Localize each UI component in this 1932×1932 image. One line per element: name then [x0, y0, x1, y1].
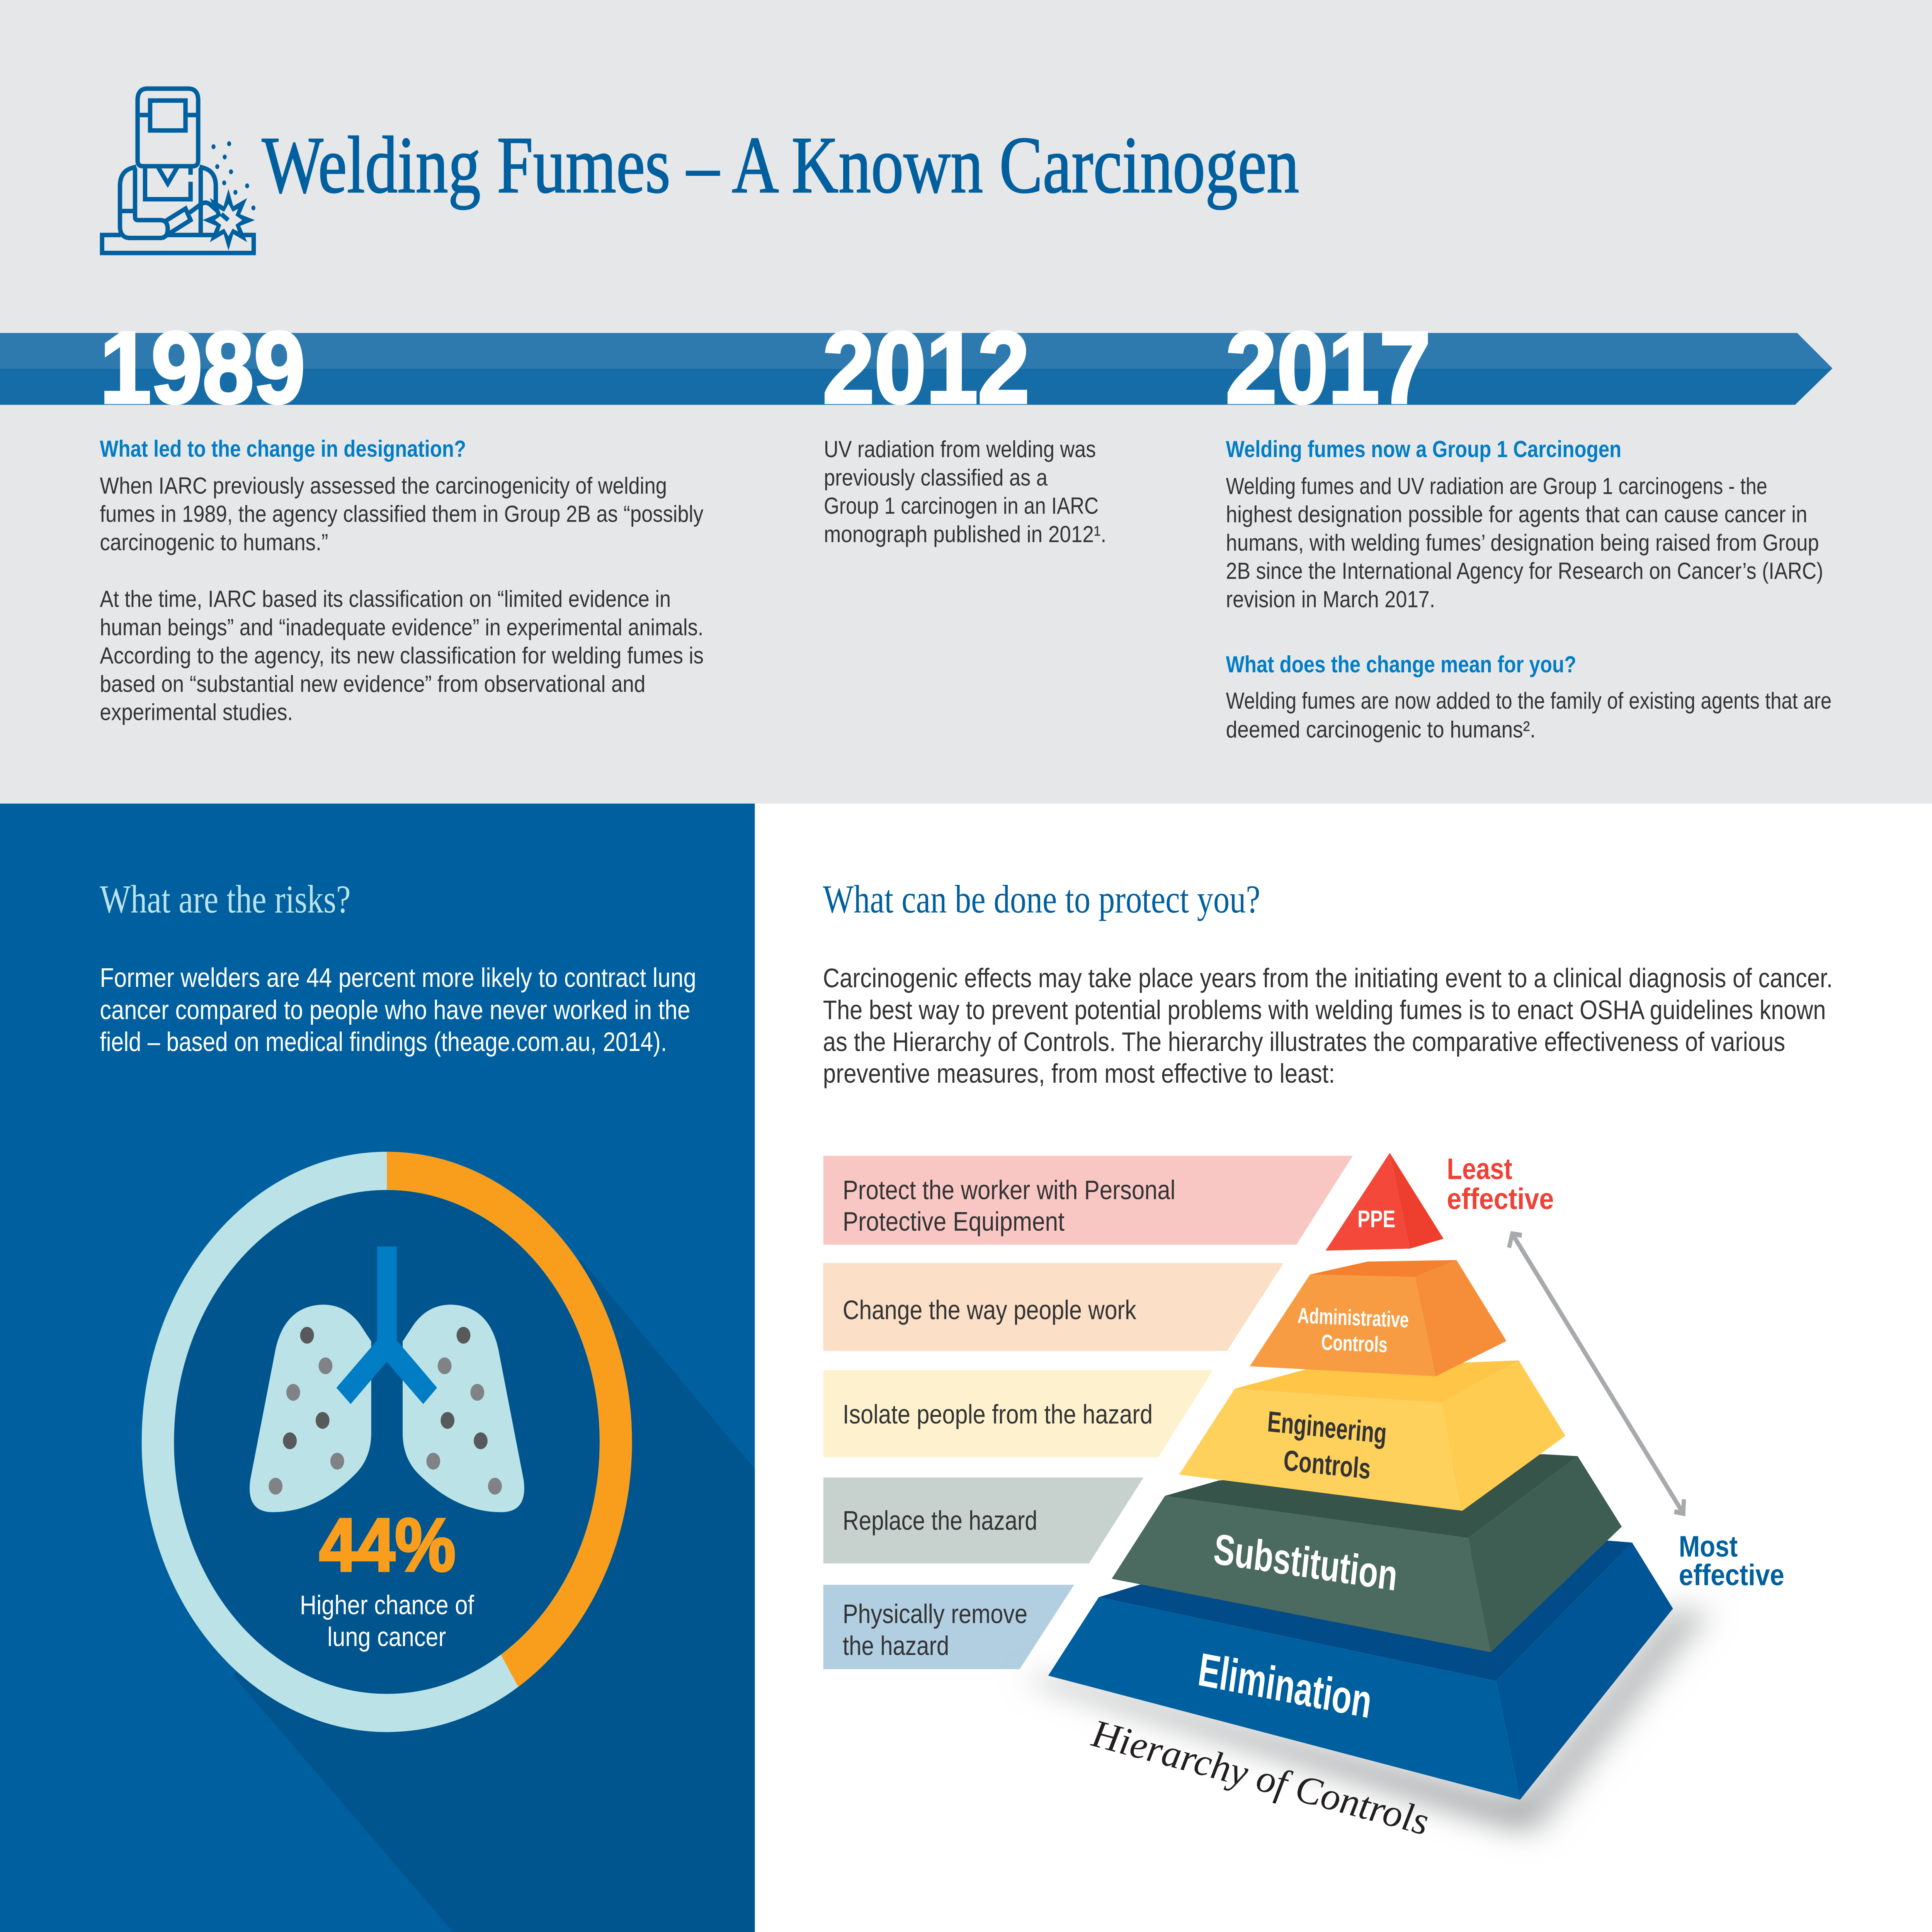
- text block: what does the change mean: Welding fumes are now added to the family of existing agents that are: [1226, 687, 1832, 714]
- tier: substitution: [1112, 1454, 1622, 1652]
- text block: Group 1 carcinogen: 2B since the International Agency for Research on Cancer’s (IARC): [1226, 558, 1823, 584]
- stat caption: Higher chance of: [300, 1590, 474, 1620]
- heading: what led to the change: What led to the change in designation?: [100, 435, 466, 462]
- tier: engineering controls: Controls: [1282, 1444, 1372, 1485]
- bar: PPE: Protect the worker with Personal: [843, 1175, 1175, 1205]
- protect text: [823, 963, 1833, 1088]
- label: most effective: [1679, 1530, 1784, 1592]
- bar: administrative: [823, 1263, 1284, 1351]
- tier: elimination: [1048, 1541, 1673, 1800]
- bar: elimination: the hazard: [843, 1631, 949, 1661]
- risks text: field – based on medical findings (theage.com.au, 2014).: [100, 1027, 667, 1057]
- bar: PPE: [823, 1156, 1353, 1245]
- stat caption: lung cancer: [327, 1622, 446, 1652]
- year 1989: 1989: [100, 310, 305, 424]
- label: most effective: Most: [1679, 1530, 1738, 1563]
- bar: PPE: Protective Equipment: [843, 1206, 1065, 1236]
- bar: engineering: Isolate people from the hazard: [843, 1399, 1153, 1429]
- bar: administrative: Change the way people work: [843, 1295, 1136, 1325]
- year 2012: 2012: [823, 310, 1029, 424]
- tier: administrative controls: Administrative: [1297, 1303, 1409, 1332]
- heading: now a Group 1 carcinogen: Welding fumes now a Group 1 Carcinogen: [1226, 436, 1621, 462]
- text block: what led to the change: When IARC previously assessed the carcinogenicity of welding: [100, 472, 667, 498]
- icon: welder: [102, 88, 255, 253]
- control label bars: [823, 1156, 1353, 1669]
- text block: what does the change mean: deemed carcinogenic to humans².: [1226, 716, 1536, 742]
- bar: substitution: [823, 1478, 1143, 1563]
- text block: Group 1 carcinogen: highest designation possible for agents that can cause cancer in: [1226, 501, 1807, 527]
- label: least effective: [1447, 1153, 1554, 1216]
- label: hierarchy of controls: Hierarchy of Controls: [1088, 1710, 1432, 1844]
- header panel background: [0, 0, 1932, 804]
- text block: what led to the change: fumes in 1989, the agency classified them in Group 2B as “possibly: [100, 501, 703, 527]
- text block: UV radiation: [824, 436, 1106, 547]
- text block: UV radiation: monograph published in 2012¹.: [824, 521, 1106, 547]
- text block: Group 1 carcinogen: revision in March 2017.: [1226, 586, 1435, 612]
- text block: what led to the change: human beings” and “inadequate evidence” in experimental animals.: [100, 614, 703, 640]
- risks text: [100, 963, 696, 1057]
- text block: Group 1 carcinogen: humans, with welding fumes’ designation being raised from Group: [1226, 529, 1819, 556]
- icon: lungs: [250, 1247, 524, 1512]
- tier: PPE: PPE: [1357, 1206, 1395, 1233]
- tier: elimination: Elimination: [1195, 1643, 1375, 1728]
- text block: UV radiation: Group 1 carcinogen in an IARC: [824, 493, 1099, 519]
- label: most effective: effective: [1679, 1559, 1784, 1592]
- text block: what does the change mean: [1226, 651, 1832, 742]
- stat: 44 percent: 44%: [319, 1503, 456, 1587]
- text block: Group 1 carcinogen: Welding fumes and UV radiation are Group 1 carcinogens - the: [1226, 473, 1767, 499]
- tier: administrative controls: Controls: [1321, 1330, 1388, 1357]
- risks text: cancer compared to people who have never worked in the: [100, 995, 690, 1025]
- risks text: Former welders are 44 percent more likely to contract lung: [100, 963, 696, 993]
- timeline arrow: [0, 333, 1832, 405]
- text block: UV radiation: UV radiation from welding was: [824, 436, 1096, 462]
- tier: engineering controls: Engineering: [1266, 1405, 1388, 1450]
- bar: substitution: Replace the hazard: [843, 1505, 1037, 1536]
- tier: PPE: [1326, 1153, 1444, 1251]
- protect text: preventive measures, from most effective to least:: [823, 1059, 1335, 1088]
- heading: what can be done: What can be done to protect you?: [823, 877, 1260, 921]
- heading: what are the risks: What are the risks?: [100, 877, 350, 921]
- tier: engineering controls: [1179, 1361, 1565, 1511]
- text block: what led to the change: carcinogenic to humans.”: [100, 529, 328, 555]
- text block: Group 1 carcinogen: [1226, 436, 1823, 612]
- text block: what led to the change: [100, 435, 704, 725]
- donut chart: 44 percent: [158, 1171, 616, 1713]
- heading: what does the change mean: What does the change mean for you?: [1226, 651, 1576, 677]
- year 2017: 2017: [1226, 310, 1431, 424]
- tier: substitution: Substitution: [1211, 1524, 1400, 1600]
- bar: engineering: [823, 1370, 1213, 1457]
- tier: administrative controls: [1250, 1260, 1507, 1376]
- protect text: as the Hierarchy of Controls. The hierarchy illustrates the comparative effectiveness of various: [823, 1027, 1785, 1057]
- text block: what led to the change: At the time, IARC based its classification on “limited evidence in: [100, 585, 671, 612]
- bar: elimination: [823, 1585, 1074, 1669]
- text block: what led to the change: According to the agency, its new classification for welding fumes is: [100, 642, 704, 668]
- protect text: The best way to prevent potential problems with welding fumes is to enact OSHA guidelines known: [823, 995, 1826, 1025]
- bar: elimination: Physically remove: [843, 1599, 1027, 1629]
- pyramid: hierarchy of controls: [1048, 1153, 1673, 1800]
- label: least effective: Least: [1447, 1153, 1512, 1186]
- title: Welding Fumes – A Known Carcinogen: [262, 120, 1299, 210]
- pyramid shadow: [1031, 1609, 1705, 1835]
- long shadow: [233, 1260, 755, 1932]
- text block: what led to the change: based on “substantial new evidence” from observational and: [100, 670, 645, 697]
- stat caption: [300, 1590, 474, 1652]
- panel: risks: [0, 804, 755, 1932]
- protect text: Carcinogenic effects may take place years from the initiating event to a clinical diagnosis of cancer.: [823, 963, 1833, 993]
- right white panel background: [755, 804, 1932, 1932]
- text block: UV radiation: previously classified as a: [824, 464, 1048, 490]
- arrow: effectiveness: [1509, 1234, 1684, 1514]
- text block: what led to the change: experimental studies.: [100, 699, 293, 725]
- label: least effective: effective: [1447, 1183, 1554, 1216]
